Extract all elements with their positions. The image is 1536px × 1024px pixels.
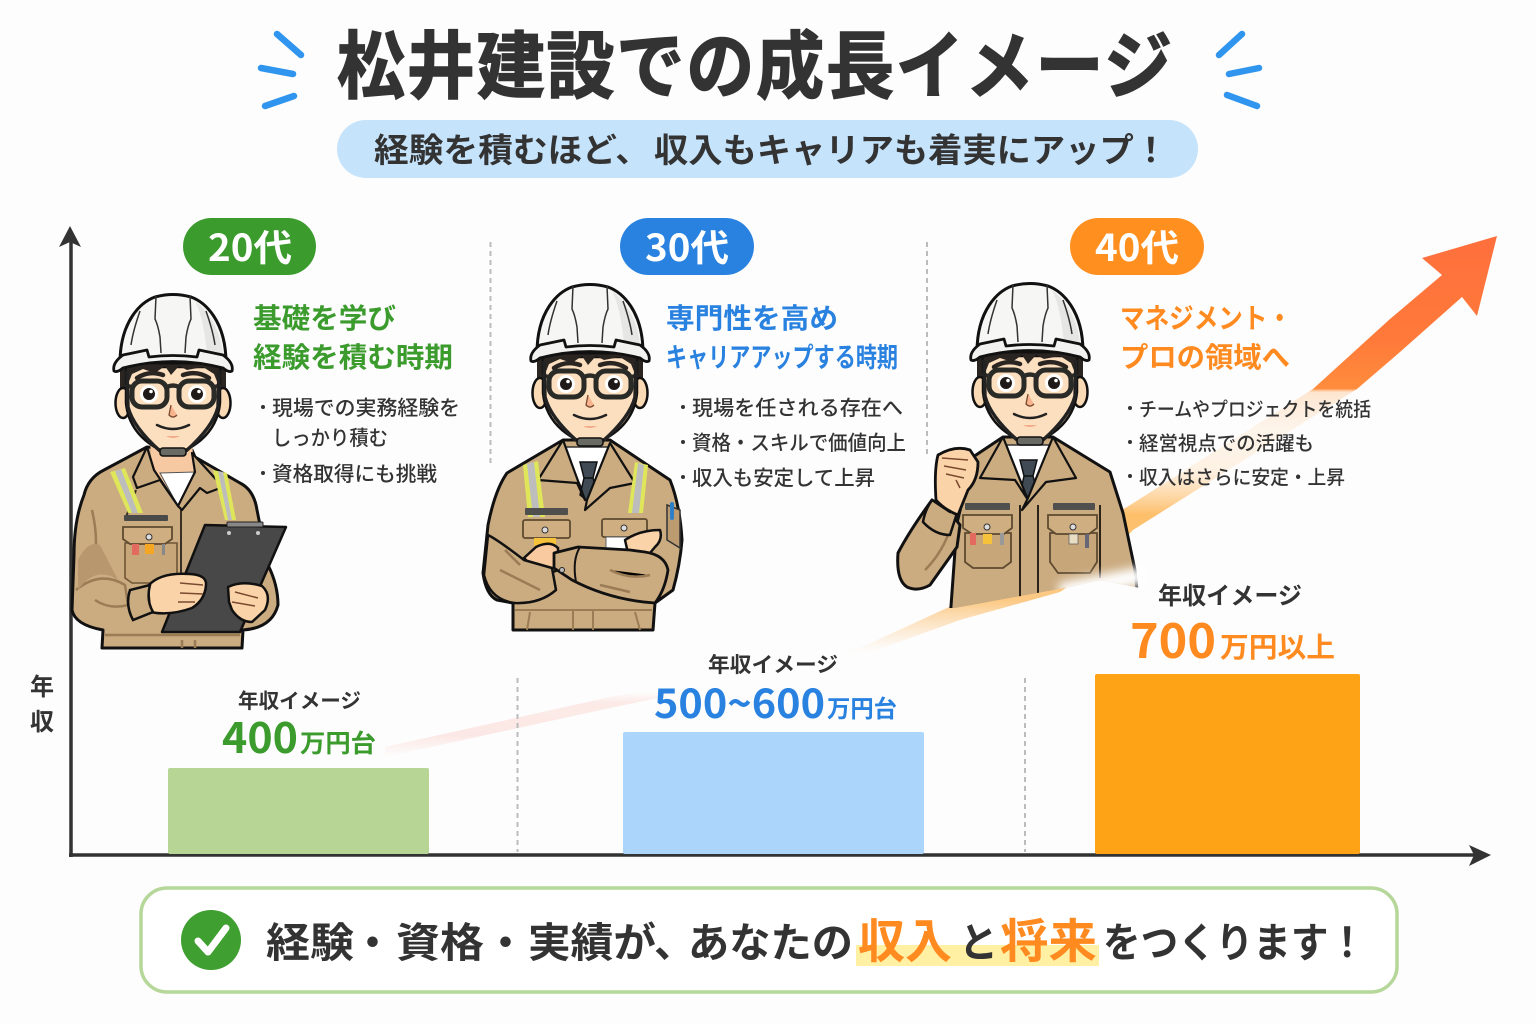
bar: 30代 (623, 732, 924, 854)
y axis label: 年 (30, 667, 54, 702)
label: 30代 income (654, 649, 897, 730)
label: 20代 income (222, 684, 376, 766)
bar: 20代 (168, 768, 429, 854)
label: 40代 income: 700 (1130, 603, 1216, 672)
bullets: 40代: チームやプロジェクトを統括 (1139, 393, 1371, 422)
bullets: 40代: 経営視点での活躍も (1139, 427, 1314, 456)
summary text: 資格 (396, 909, 484, 969)
badge: 30代: 30代 (645, 218, 729, 272)
summary text: 将来 (1000, 903, 1097, 972)
title: 松井建設での成長イメージ (337, 8, 1172, 114)
worker: 20代 with clipboard (72, 294, 286, 648)
highlight (856, 945, 1099, 966)
heading: 30代: キャリアアップする時期 (666, 336, 898, 375)
axis: vertical (59, 226, 81, 857)
bullets: 30代: 収入も安定して上昇 (692, 461, 875, 491)
label: 20代 income: 400 (222, 705, 298, 766)
heading: 30代 (666, 297, 898, 375)
subtitle pill: 収入もキャリアも着実にアップ！ (654, 123, 1168, 172)
y axis label: 収 (30, 702, 54, 737)
bullets: 20代: 資格取得にも挑戦 (272, 457, 438, 487)
heading: 40代: マネジメント・ (1120, 297, 1292, 337)
heading: 30代: 専門性を高め (666, 297, 838, 337)
summary text: 経験 (266, 909, 354, 969)
summary text: ・ (485, 909, 526, 969)
worker: 40代 fist raised (898, 284, 1145, 620)
bullets: 20代 (261, 391, 460, 487)
bullets: 40代: 収入はさらに安定・上昇 (1139, 461, 1345, 490)
summary text: あなたの (688, 909, 853, 969)
bar: 40代 (1095, 674, 1360, 854)
subtitle pill: 経験を積むほど、 (374, 123, 650, 172)
label: 40代 income: 年収イメージ (1158, 576, 1302, 611)
subtitle pill (337, 120, 1198, 178)
summary text: 収入 (858, 903, 952, 972)
badge: 20代: 20代 (208, 218, 292, 272)
bullets: 20代: 現場での実務経験を (272, 391, 460, 421)
label: 30代 income: 年収イメージ (708, 649, 838, 679)
summary box (141, 888, 1397, 992)
summary text: をつくります！ (1103, 909, 1366, 969)
heading: 20代: 経験を積む時期 (253, 336, 453, 376)
heading: 40代 (1120, 297, 1292, 376)
label: 30代 income: 500~600 (654, 672, 825, 730)
badge: 40代 (1070, 218, 1204, 275)
heading: 20代 (253, 297, 453, 376)
summary text (266, 903, 1366, 972)
bullets: 40代 (1128, 393, 1371, 490)
worker: 30代 arms crossed (483, 284, 682, 630)
summary text: 実績が (528, 909, 656, 969)
label: 20代 income: 万円台 (300, 724, 376, 760)
label: 30代 income: 万円台 (827, 689, 897, 724)
bullets: 20代: しっかり積む (272, 421, 388, 451)
growth arrow (385, 236, 1497, 757)
heading: 20代: 基礎を学び (253, 297, 396, 337)
bullets: 30代 (681, 391, 906, 491)
badge: 40代: 40代 (1095, 218, 1179, 272)
label: 40代 income (1130, 576, 1335, 672)
title sparks left (261, 34, 301, 106)
summary text: と (959, 909, 998, 969)
axis: horizontal (69, 845, 1491, 866)
label: 40代 income: 万円以上 (1220, 626, 1335, 666)
label: 20代 income: 年収イメージ (238, 684, 361, 714)
summary text: 、 (654, 909, 695, 969)
icon: check (181, 910, 241, 970)
bullets: 30代: 現場を任される存在へ (692, 391, 903, 421)
bullets: 30代: 資格・スキルで価値向上 (692, 426, 906, 456)
y axis label (30, 667, 54, 737)
heading: 40代: プロの領域へ (1120, 336, 1290, 376)
summary text: ・ (352, 909, 393, 969)
badge: 20代 (183, 218, 316, 275)
title sparks right (1219, 34, 1259, 106)
badge: 30代 (620, 218, 754, 275)
